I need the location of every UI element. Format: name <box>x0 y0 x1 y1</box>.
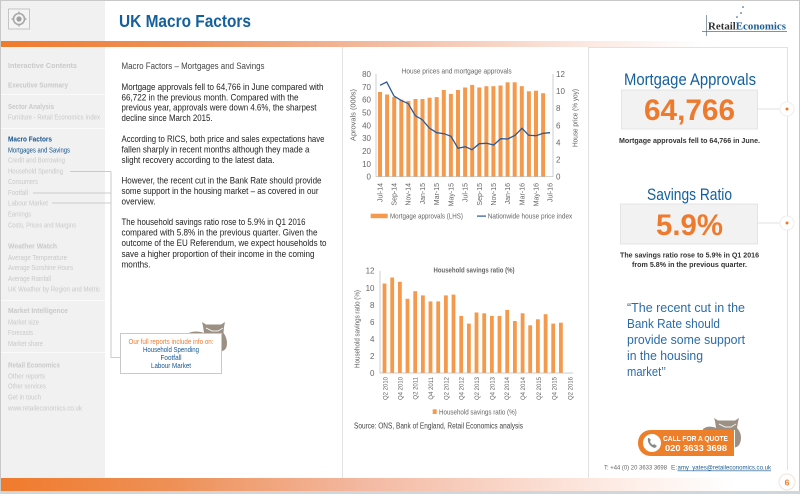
body text: Macro Factors – Mortgages and Savings <box>122 61 265 71</box>
y axis titles <box>348 89 580 147</box>
callout: full reports: Footfall <box>160 355 182 362</box>
legend: Household savings ratio (%) <box>439 408 517 416</box>
sidebar navigation: Market share <box>8 341 43 348</box>
body text: decline since March 2015. <box>122 112 212 123</box>
panel: right column frame <box>588 48 788 470</box>
chart title: House prices and mortgage approvals <box>402 66 512 76</box>
button <box>638 430 734 456</box>
caption: from 5.8% in the previous quarter. <box>632 260 747 269</box>
x axis labels: Jul-15 <box>462 183 470 202</box>
sidebar navigation: Interactive Contents <box>8 61 77 70</box>
bars: savings ratio <box>383 278 563 373</box>
body text: some support in the housing market – as covered in our <box>122 185 318 196</box>
x axis labels: Jul-16 <box>548 183 554 202</box>
right axis labels: 10 <box>556 87 565 96</box>
right axis labels: 4 <box>556 138 561 148</box>
stat value: 5.9% <box>656 209 723 242</box>
pull quote <box>627 301 746 379</box>
x axis labels <box>378 183 554 206</box>
body text <box>122 61 326 269</box>
body text: outcome of the EU Referendum, we expect households to <box>122 237 326 248</box>
x axis labels: Mar-15 <box>434 183 441 205</box>
panel: sidebar background <box>1 1 105 478</box>
sidebar navigation: Weather Watch <box>8 242 57 250</box>
panel: mortgage approvals stat <box>619 71 760 145</box>
x axis labels: Nov-14 <box>406 183 412 206</box>
y axis labels: 4 <box>370 335 375 344</box>
x axis labels: Sep-15 <box>477 183 484 206</box>
connector nodes on right edge <box>758 102 794 230</box>
sidebar navigation: Furniture - Retail Economics Index <box>8 114 100 122</box>
left axis labels: 50 <box>362 108 372 118</box>
stat value: 64,766 <box>644 94 735 127</box>
callout connector lines <box>33 172 120 358</box>
left axis labels: 10 <box>362 160 372 169</box>
caption: Mortgage approvals fell to 64,766 in June. <box>619 136 760 145</box>
x axis labels: Q4 2013 <box>490 376 496 400</box>
x axis labels: Jan-16 <box>505 183 512 204</box>
caption: The savings ratio rose to 5.9% in Q1 2016 <box>620 250 759 260</box>
logo: Retail Economics <box>702 6 787 36</box>
sidebar navigation: Get in touch <box>8 394 41 402</box>
icon: phone <box>643 434 661 452</box>
line: nationwide house price index <box>380 82 550 150</box>
stat box <box>620 204 758 244</box>
left axis labels: 40 <box>362 121 372 130</box>
x axis labels <box>383 376 574 400</box>
x axis labels: Mar-16 <box>520 183 526 205</box>
logo: Retail Economics: RetailEconomics <box>708 20 787 32</box>
top orange band <box>1 41 799 47</box>
y axis labels: 0 <box>370 369 375 378</box>
sidebar navigation: Credit and Borrowing <box>8 158 65 164</box>
callout: full reports: Household Spending <box>143 347 199 354</box>
panel dividers <box>342 47 588 478</box>
bar and line chart: house prices and mortgage approvals <box>348 66 580 220</box>
sidebar navigation: Mortgages and Savings <box>8 148 70 154</box>
sidebar navigation: Average Rainfall <box>8 276 51 283</box>
x axis labels: Q4 2011 <box>429 376 435 400</box>
bar chart: household savings ratio <box>352 266 574 416</box>
pull quote: market’’ <box>627 365 666 379</box>
heading: Mortgage Approvals <box>624 71 756 89</box>
sidebar navigation: Average Sunshine Hours <box>8 265 73 272</box>
x axis labels: Q2 2011 <box>414 376 420 400</box>
sidebar navigation: Labour Market <box>8 200 48 208</box>
x axis labels: Q4 2015 <box>552 376 558 400</box>
bars: mortgage approvals <box>378 82 545 177</box>
icon: owl <box>703 418 741 448</box>
sidebar navigation: Footfall <box>8 190 28 197</box>
bottom orange band <box>1 478 799 491</box>
body text: According to RICS, both price and sales expectations have <box>122 133 324 144</box>
x axis labels: Q2 2015 <box>537 376 543 400</box>
pull quote: provide some support <box>627 333 746 347</box>
body text: Mortgage approvals fell to 64,766 in June compared with <box>122 81 324 92</box>
sidebar navigation: Household Spending <box>8 168 63 176</box>
sidebar navigation: Market Intelligence <box>8 306 68 315</box>
right axis labels: 6 <box>556 121 561 130</box>
sidebar navigation <box>1 61 105 412</box>
y axis labels: 8 <box>370 301 375 310</box>
legend: Mortgage approvals (LHS) <box>390 212 463 220</box>
callout: full reports: Our full reports include info on: <box>128 339 214 346</box>
y axis labels: 2 <box>370 352 375 361</box>
right axis labels: 12 <box>556 70 565 79</box>
button text: CALL FOR A QUOTE <box>663 434 728 443</box>
panel: savings ratio stat <box>620 186 759 269</box>
contact details: T: +44 (0) 20 3633 3698 <box>604 464 667 472</box>
body text: However, the recent cut in the Bank Rate should provide <box>122 175 322 186</box>
right axis labels: 8 <box>556 104 561 113</box>
x axis labels: Jul-14 <box>378 183 384 202</box>
call for a quote button <box>638 418 741 456</box>
body text: compared with 5.8% in the previous quarter. Given the <box>122 226 318 237</box>
right axis labels: 0 <box>556 173 561 182</box>
left axis labels: 60 <box>362 96 372 105</box>
x axis labels: Sep-14 <box>392 183 398 206</box>
callout: full reports: Labour Market <box>151 363 191 370</box>
heading: Savings Ratio <box>647 186 732 204</box>
left axis labels: 30 <box>362 134 372 143</box>
sidebar navigation: Other reports <box>8 374 45 380</box>
source note: Source: ONS, Bank of England, Retail Economics analysis <box>354 422 523 430</box>
y axis labels <box>366 267 375 378</box>
body text: fallen sharply in recent months although they made a <box>122 143 310 154</box>
sidebar navigation: Retail Economics <box>8 360 60 370</box>
left axis labels: 80 <box>362 70 372 79</box>
sidebar navigation: UK Weather by Region and Metric <box>8 286 100 294</box>
sidebar navigation: www.retaileconomics.co.uk <box>7 406 82 412</box>
x axis labels: Q2 2014 <box>505 376 511 400</box>
icon: settings gear <box>8 9 30 29</box>
pull quote: in the housing <box>627 349 703 363</box>
left axis labels: 20 <box>362 147 372 156</box>
pull quote: “The recent cut in the <box>627 301 745 315</box>
callout: full reports <box>120 334 222 374</box>
body text: months. <box>122 258 150 269</box>
x axis labels: Q4 2012 <box>460 376 466 400</box>
caption <box>620 250 759 269</box>
call for a quote button: 020 3633 3698 <box>665 443 727 453</box>
sidebar navigation: Costs, Prices and Margins <box>8 222 76 230</box>
title: UK Macro Factors <box>119 11 251 31</box>
x axis labels: Q4 2014 <box>521 376 527 400</box>
contact details <box>604 464 772 472</box>
x axis labels: Q2 2012 <box>444 376 450 400</box>
sidebar navigation: Earnings <box>8 212 31 218</box>
body text: overview. <box>122 195 156 206</box>
page number <box>779 474 795 490</box>
left axis labels <box>362 70 372 182</box>
x axis labels: Q2 2010 <box>383 376 389 400</box>
y axis labels: 12 <box>366 267 375 276</box>
body text: save a higher proportion of their income in the coming <box>122 248 314 259</box>
left axis labels: 0 <box>367 173 372 182</box>
x axis labels: Jan-15 <box>420 183 427 204</box>
icon: owl behind callout <box>189 322 227 352</box>
right axis labels: 2 <box>556 156 561 165</box>
chart title: Household savings ratio (%) <box>434 266 515 274</box>
y axis titles: Aprovals (000s) <box>348 89 358 141</box>
sidebar navigation: Average Temperature <box>8 255 67 262</box>
sidebar navigation: Consumers <box>8 179 38 186</box>
x axis labels: Q4 2010 <box>398 376 404 400</box>
body text: slight recovery according to the latest data. <box>122 154 274 165</box>
y axis title: Household savings ratio (%) <box>352 290 362 368</box>
x axis labels: May-15 <box>448 183 456 206</box>
sidebar navigation: Macro Factors <box>8 134 52 144</box>
left axis labels: 70 <box>362 83 372 92</box>
y axis labels: 6 <box>370 318 375 327</box>
page number: 6 <box>785 478 790 488</box>
sidebar navigation: Other services <box>8 384 46 390</box>
sidebar navigation: Market size <box>8 320 39 326</box>
body text: previous year, approvals were down 4.6%, the sharpest <box>122 102 317 113</box>
pull quote: Bank Rate should <box>627 317 720 331</box>
y axis labels: 10 <box>366 284 375 293</box>
x axis labels: Nov-15 <box>491 183 498 206</box>
right axis labels <box>556 70 565 182</box>
legend: Nationwide house price index <box>488 212 573 220</box>
y axis titles: House price (% yoy) <box>570 89 580 147</box>
contact details: E: <box>671 464 677 472</box>
legend <box>371 212 573 220</box>
sidebar navigation: Sector Analysis <box>8 102 54 111</box>
x axis labels: May-16 <box>534 183 540 206</box>
sidebar navigation: Forecasts <box>8 330 33 337</box>
sidebar navigation: Executive Summary <box>8 80 69 90</box>
x axis labels: Q2 2016 <box>568 376 574 400</box>
body text: The household savings ratio rose to 5.9% in Q1 2016 <box>122 216 306 227</box>
stat box <box>622 90 758 129</box>
contact details: amy_yates@retaileconomics.co.uk <box>678 464 772 472</box>
body text: 66,722 in the previous month. Compared with the <box>122 91 298 102</box>
x axis labels: Q2 2013 <box>475 376 481 400</box>
